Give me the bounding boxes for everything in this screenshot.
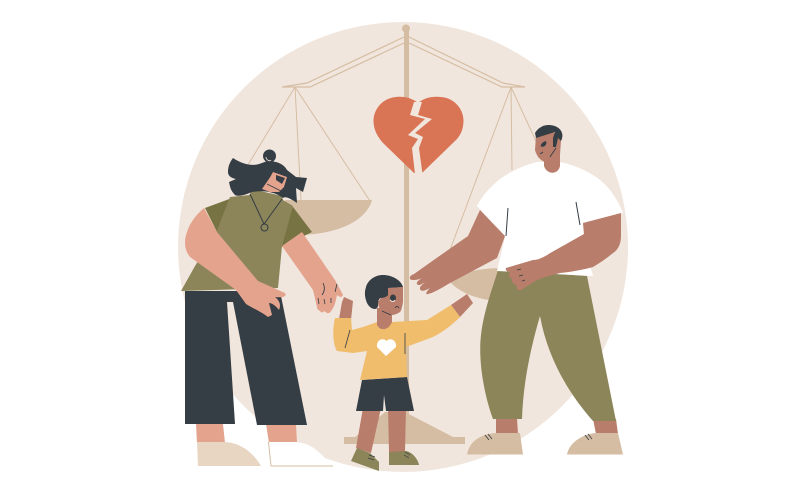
child hair	[365, 275, 403, 309]
heart shape	[373, 97, 464, 173]
man hair	[535, 125, 562, 147]
woman trousers	[185, 291, 307, 425]
heart on shirt	[377, 339, 396, 356]
woman chin line	[267, 184, 281, 191]
balance scale	[248, 24, 540, 444]
background circle	[178, 22, 628, 472]
woman left arm	[185, 208, 286, 317]
man near arm	[506, 213, 621, 290]
child raised right hand	[451, 294, 473, 317]
scale pole	[404, 30, 409, 438]
woman right arm	[282, 232, 343, 313]
man trousers	[480, 270, 616, 421]
woman face	[262, 172, 287, 192]
left pan strings	[248, 87, 370, 201]
sleeve creases	[506, 202, 580, 236]
right pan strings	[450, 87, 540, 250]
man shirt	[477, 162, 623, 276]
woman left shoe	[197, 442, 261, 466]
man neck	[544, 150, 560, 173]
shoe outline	[268, 442, 333, 466]
child right shoe	[389, 451, 419, 465]
child shoe laces	[368, 452, 410, 460]
heart crack	[408, 102, 432, 174]
woman hair	[228, 158, 307, 203]
child shirt	[333, 305, 460, 380]
child mouth	[382, 306, 399, 315]
woman figure	[181, 150, 343, 466]
man left shoe	[467, 433, 523, 454]
child eye highlight	[390, 300, 395, 302]
man eye and mouth	[540, 142, 556, 157]
child eye	[390, 294, 396, 302]
child legs	[356, 408, 406, 453]
right pan	[449, 268, 505, 302]
broken heart	[373, 97, 464, 174]
scale top knob	[402, 24, 410, 32]
child raised left hand	[339, 297, 353, 320]
shirt creases	[345, 330, 405, 354]
child figure	[333, 275, 473, 471]
man face	[535, 131, 561, 162]
man ankles	[496, 418, 618, 434]
woman eye	[276, 175, 285, 184]
man figure	[410, 125, 623, 454]
woman left sleeve	[205, 198, 232, 240]
necklace	[250, 194, 282, 231]
finger lines	[318, 283, 337, 304]
child face	[378, 287, 403, 315]
left pan	[285, 200, 372, 235]
child left shoe	[351, 448, 379, 471]
scale base	[344, 412, 465, 444]
woman right shoe	[268, 442, 333, 466]
man far arm	[410, 210, 505, 294]
child neck	[377, 308, 392, 329]
child shorts	[356, 377, 414, 411]
hair tie	[266, 157, 271, 161]
shoe laces	[485, 434, 592, 440]
woman legs	[196, 424, 297, 443]
scale beam	[282, 37, 525, 87]
man right shoe	[567, 433, 623, 454]
finger lines	[517, 269, 525, 281]
woman right sleeve	[275, 203, 312, 247]
woman bun	[263, 150, 276, 162]
woman top	[181, 189, 293, 291]
